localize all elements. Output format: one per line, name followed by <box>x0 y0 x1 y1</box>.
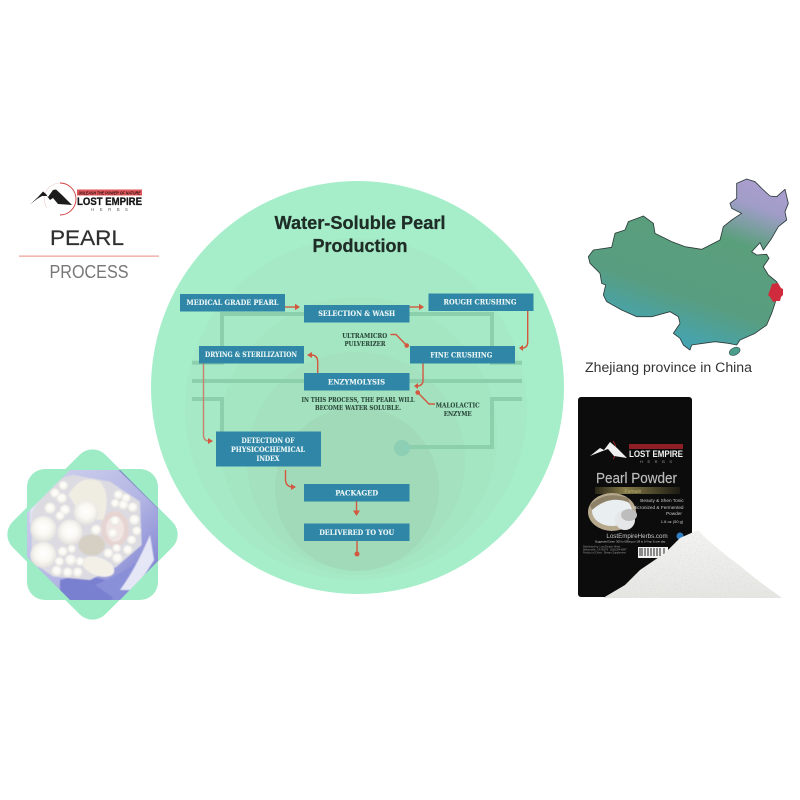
logo: Lost Empire Herbs <box>30 183 142 215</box>
pouch description: Micronized & Fermented <box>632 505 684 510</box>
icon: blue badge <box>676 532 684 540</box>
panel: central process circle <box>151 181 564 594</box>
pouch logo <box>590 441 683 464</box>
arrow: detection to packaged <box>286 470 296 490</box>
step: drying and sterilization: DRYING & STERILIZATION <box>205 350 297 359</box>
step: drying and sterilization <box>199 346 304 364</box>
step: packaged <box>304 484 410 502</box>
pouch fine print: Product of China · Dietary Supplement <box>583 552 626 554</box>
step: selection and wash <box>304 305 410 322</box>
pouch description: Suggested Dose: 300 to 600mg or 1/8 to 1/4 tsp 3x per day <box>595 540 666 544</box>
step: detection of physicochemical index: INDEX <box>256 454 280 463</box>
arrow: delivered end dot <box>354 541 360 556</box>
arrow: medical to selection <box>285 304 300 310</box>
subheading: PROCESS: PROCESS <box>50 262 128 282</box>
pouch description <box>595 498 684 544</box>
step: selection and wash: SELECTION & WASH <box>318 309 395 318</box>
title <box>274 212 446 256</box>
step: fine crushing <box>410 346 515 364</box>
rosette backing shapes <box>0 442 185 627</box>
panel: left header with logo <box>19 183 159 282</box>
arrow: rough to fine crushing <box>519 311 528 351</box>
arrow: packaged to delivered <box>353 502 360 516</box>
background circuit lines <box>192 314 522 447</box>
pouch fine print: Distributed by: Lost Empire Herbs <box>583 546 621 548</box>
pouch description: Beauty & Shen Tonic <box>640 498 684 503</box>
background circle <box>151 181 564 594</box>
map caption: Zhejiang province in China <box>585 360 752 375</box>
title: Water-Soluble Pearl <box>274 212 446 233</box>
pouch description: Powder <box>666 511 682 516</box>
logo: Lost Empire Herbs: UNLEASH THE POWER OF NATURE <box>78 190 141 195</box>
panel: China map <box>585 179 788 375</box>
heading: PEARL: PEARL <box>50 227 124 250</box>
pouch fine print <box>583 546 627 554</box>
connector: malolactic enzyme <box>415 390 435 404</box>
note: water soluble: BECOME WATER SOLUBLE. <box>315 404 401 412</box>
arrow: enzymolysis to drying <box>307 352 318 373</box>
step: fine crushing: FINE CRUSHING <box>430 350 492 359</box>
step: enzymolysis <box>304 373 410 390</box>
pouch description: 1.8 oz (50 g) <box>661 519 684 524</box>
note: water soluble: IN THIS PROCESS, THE PEARL WILL <box>302 396 415 404</box>
note: malolactic enzyme: ENZYME <box>444 410 472 418</box>
pearl photo <box>27 470 158 600</box>
pouch band <box>595 487 680 495</box>
circuit node <box>394 440 410 456</box>
Zhejiang highlight <box>768 283 783 302</box>
pouch fine print: Watsonville, CA 95076 · (831)204-8947 <box>583 548 627 552</box>
note: ultramicro pulverizer: PULVERIZER <box>344 340 386 348</box>
note: water soluble <box>302 396 415 412</box>
logo: Lost Empire Herbs: LOST EMPIRE <box>77 196 142 208</box>
step: enzymolysis: ENZYMOLYSIS <box>328 377 385 386</box>
panel: pearl photo in rosette <box>7 449 178 620</box>
oyster illustration <box>588 493 637 531</box>
step: detection of physicochemical index: PHYSICOCHEMICAL <box>231 445 306 454</box>
step: packaged: PACKAGED <box>335 488 379 497</box>
powder pile <box>603 530 782 598</box>
barcode <box>638 547 668 558</box>
step: detection of physicochemical index <box>216 432 321 466</box>
arrow: fine crushing to enzymolysis <box>414 363 423 389</box>
panel: product pouch and powder <box>578 397 782 598</box>
pouch logo: HERBS <box>640 459 672 464</box>
note: ultramicro pulverizer: ULTRAMICRO <box>342 332 387 340</box>
infographic canvas <box>7 178 789 620</box>
arrow: drying to detection <box>204 363 213 444</box>
step: rough crushing: ROUGH CRUSHING <box>444 298 516 306</box>
pouch description: LostEmpireHerbs.com <box>606 533 668 540</box>
step: medical grade pearl: MEDICAL GRADE PEARL <box>186 298 279 307</box>
map of China <box>588 179 788 357</box>
note: ultramicro pulverizer <box>342 332 387 348</box>
note: malolactic enzyme: MALOLACTIC <box>436 402 480 410</box>
arrow: selection to rough crushing <box>409 304 424 310</box>
logo: Lost Empire Herbs: HERBS <box>91 207 128 212</box>
title: Production <box>312 235 408 256</box>
step: medical grade pearl <box>180 294 285 312</box>
connector: ultramicro pulverizer <box>390 334 409 348</box>
pouch title: Pearl Powder <box>596 471 677 487</box>
pouch logo: LOST EMPIRE <box>629 449 683 459</box>
pouch <box>578 397 692 597</box>
pouch band: Female <box>625 489 642 495</box>
step: rough crushing <box>428 294 534 311</box>
step: detection of physicochemical index: DETECTION OF <box>242 436 295 445</box>
step: delivered to you <box>304 524 410 541</box>
note: malolactic enzyme <box>436 402 480 418</box>
pearls and shells <box>30 475 142 581</box>
step: delivered to you: DELIVERED TO YOU <box>319 528 395 537</box>
